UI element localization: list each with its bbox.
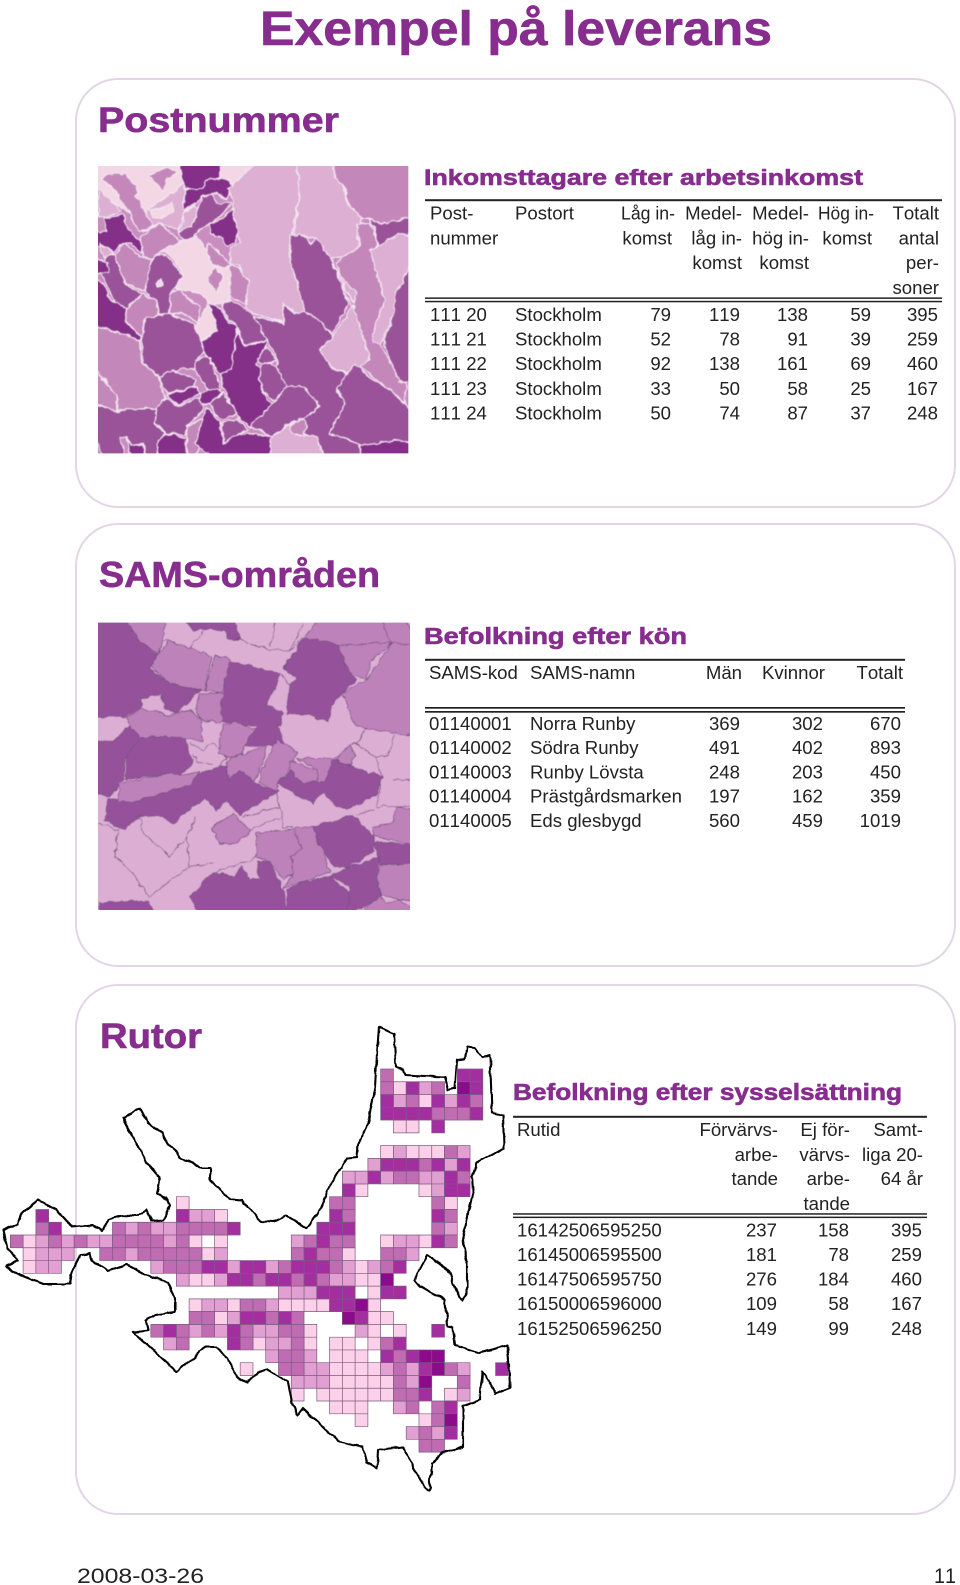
table: inkomsttagare: Stockholm <box>515 304 602 325</box>
table: inkomsttagare: 111 22 <box>430 353 487 374</box>
table: inkomsttagare: 111 24 <box>430 402 487 423</box>
table: inkomsttagare: låg in- <box>691 228 742 248</box>
table heading: Befolkning efter sysselsättning: Befolkning efter sysselsättning <box>513 1079 902 1105</box>
table: befolkning efter kön: 162 <box>792 786 823 807</box>
table: befolkning efter kön: Eds glesbygd <box>530 810 642 831</box>
table: befolkning efter sysselsättning: 58 <box>828 1293 849 1314</box>
map: postnummer areas <box>90 160 417 460</box>
table: befolkning efter sysselsättning: 460 <box>891 1269 922 1290</box>
table: befolkning efter sysselsättning: 248 <box>891 1318 922 1339</box>
panel: SAMS-områden <box>76 524 955 966</box>
table: inkomsttagare: 91 <box>787 329 808 350</box>
table: inkomsttagare: 111 21 <box>430 329 487 350</box>
table: befolkning efter kön: 369 <box>709 713 740 734</box>
table: befolkning efter sysselsättning: värvs- <box>799 1144 850 1165</box>
table heading: Inkomsttagare efter arbetsinkomst: Inkomsttagare efter arbetsinkomst <box>424 165 864 190</box>
table: befolkning efter sysselsättning <box>513 1116 927 1339</box>
table: inkomsttagare: Postort <box>515 202 575 224</box>
table: befolkning efter kön: SAMS-namn <box>530 662 635 683</box>
table: befolkning efter kön: 01140005 <box>429 810 512 831</box>
table: inkomsttagare: komst <box>759 252 810 273</box>
table: inkomsttagare: 167 <box>907 378 938 399</box>
table: befolkning efter sysselsättning: 16142506595250 <box>517 1220 662 1241</box>
table: befolkning efter kön: 491 <box>709 737 740 758</box>
table: inkomsttagare: 25 <box>850 378 871 399</box>
table: befolkning efter kön: 302 <box>792 713 823 734</box>
table: befolkning efter sysselsättning: arbe- <box>735 1144 778 1165</box>
table: inkomsttagare: 395 <box>907 304 938 325</box>
table: befolkning efter kön: 01140002 <box>429 737 512 758</box>
table: befolkning efter sysselsättning: 109 <box>746 1293 777 1314</box>
table: inkomsttagare: Stockholm <box>515 329 602 350</box>
table: befolkning efter sysselsättning: 158 <box>818 1220 849 1241</box>
table: befolkning efter kön: 459 <box>792 810 823 831</box>
table: befolkning efter kön: Norra Runby <box>530 713 636 734</box>
table: befolkning efter kön: 402 <box>792 737 823 758</box>
table: inkomsttagare: Stockholm <box>515 402 602 423</box>
table: befolkning efter sysselsättning: liga 20- <box>862 1144 923 1165</box>
table: inkomsttagare: 50 <box>650 402 671 423</box>
table: befolkning efter kön: 893 <box>870 737 901 758</box>
table: befolkning efter kön: 01140003 <box>429 761 512 782</box>
table: inkomsttagare: Medel- <box>685 202 742 224</box>
table: befolkning efter sysselsättning: 259 <box>891 1244 922 1265</box>
table: inkomsttagare: Hög in- <box>818 202 874 224</box>
table: befolkning efter kön: 450 <box>870 761 901 782</box>
table: inkomsttagare: 50 <box>719 378 740 399</box>
heading: Postnummer: Postnummer <box>98 101 339 140</box>
table: befolkning efter sysselsättning: 181 <box>746 1244 777 1265</box>
table: befolkning efter sysselsättning: tande <box>803 1193 850 1214</box>
heading: Rutor: Rutor <box>100 1017 202 1056</box>
table: befolkning efter sysselsättning: 184 <box>818 1269 849 1290</box>
table: befolkning efter sysselsättning: 149 <box>746 1318 777 1339</box>
table: inkomsttagare: nummer <box>430 228 498 248</box>
table: befolkning efter sysselsättning: Förvärvs- <box>699 1119 778 1140</box>
table: befolkning efter kön: Män <box>706 662 742 683</box>
table: inkomsttagare: Låg in- <box>621 202 675 224</box>
table: befolkning efter sysselsättning: Samt- <box>873 1119 923 1140</box>
table: inkomsttagare <box>425 199 942 423</box>
table: inkomsttagare: komst <box>622 228 673 248</box>
table: inkomsttagare: 59 <box>850 304 871 325</box>
map: region outline <box>3 1027 510 1491</box>
table: befolkning efter kön: 01140001 <box>429 713 512 734</box>
table: inkomsttagare: komst <box>822 228 873 248</box>
table heading: Befolkning efter kön: Befolkning efter kön <box>424 623 687 649</box>
table: befolkning efter kön: 670 <box>870 713 901 734</box>
table: inkomsttagare: 138 <box>777 304 808 325</box>
table: befolkning efter kön: 248 <box>709 761 740 782</box>
table: befolkning efter sysselsättning: Rutid <box>517 1119 560 1140</box>
table: inkomsttagare: 39 <box>850 329 871 350</box>
table: inkomsttagare: 37 <box>850 402 871 423</box>
table: inkomsttagare: 69 <box>850 353 871 374</box>
table: befolkning efter kön: 203 <box>792 761 823 782</box>
table: inkomsttagare: 33 <box>650 378 671 399</box>
table: befolkning efter sysselsättning: tande <box>731 1168 778 1189</box>
table: befolkning efter kön <box>425 659 905 831</box>
panel: Rutor <box>3 985 955 1514</box>
table: inkomsttagare: per- <box>906 252 939 273</box>
table: inkomsttagare: 79 <box>650 304 671 325</box>
table: befolkning efter kön: Runby Lövsta <box>530 761 644 782</box>
table: inkomsttagare: 138 <box>709 353 740 374</box>
table: inkomsttagare: 52 <box>650 329 671 350</box>
table: befolkning efter sysselsättning: 237 <box>746 1220 777 1241</box>
table: inkomsttagare: hög in- <box>752 228 809 248</box>
table: befolkning efter kön: 1019 <box>860 810 901 831</box>
table: befolkning efter kön: Kvinnor <box>762 662 825 683</box>
table: inkomsttagare: antal <box>899 228 939 248</box>
table: inkomsttagare: 92 <box>650 353 671 374</box>
table: inkomsttagare: 87 <box>787 402 808 423</box>
table: befolkning efter sysselsättning: arbe- <box>807 1168 850 1189</box>
table: befolkning efter kön: 560 <box>709 810 740 831</box>
table: befolkning efter sysselsättning: 16152506596250 <box>517 1318 662 1339</box>
table: inkomsttagare: soner <box>892 277 939 298</box>
table: befolkning efter kön: 359 <box>870 786 901 807</box>
table: inkomsttagare: Totalt <box>892 202 940 224</box>
table: inkomsttagare: komst <box>692 252 743 273</box>
table: inkomsttagare: 58 <box>787 378 808 399</box>
table: inkomsttagare: Post- <box>430 202 473 224</box>
panel: Postnummer <box>76 79 955 507</box>
table: befolkning efter sysselsättning: 276 <box>746 1269 777 1290</box>
map: grid cells <box>10 1069 508 1452</box>
table: inkomsttagare: 78 <box>719 329 740 350</box>
table: befolkning efter kön: Totalt <box>856 662 904 683</box>
table: befolkning efter kön: SAMS-kod <box>429 662 518 683</box>
table: inkomsttagare: Stockholm <box>515 353 602 374</box>
table: befolkning efter sysselsättning: 78 <box>828 1244 849 1265</box>
table: inkomsttagare: 460 <box>907 353 938 374</box>
table: inkomsttagare: 111 23 <box>430 378 487 399</box>
table: inkomsttagare: Medel- <box>752 202 809 224</box>
table: befolkning efter sysselsättning: Ej för- <box>800 1119 850 1140</box>
table: befolkning efter kön: Södra Runby <box>530 737 639 758</box>
table: inkomsttagare: 111 20 <box>430 304 487 325</box>
table: befolkning efter sysselsättning: 64 år <box>881 1168 923 1189</box>
table: befolkning efter sysselsättning: 16147506595750 <box>517 1269 662 1290</box>
table: befolkning efter kön: 01140004 <box>429 786 512 807</box>
table: inkomsttagare: Stockholm <box>515 378 602 399</box>
heading: SAMS-områden: SAMS-områden <box>99 554 380 595</box>
table: befolkning efter sysselsättning: 395 <box>891 1220 922 1241</box>
table: inkomsttagare: 119 <box>709 304 740 325</box>
table: befolkning efter sysselsättning: 16145006595500 <box>517 1244 662 1265</box>
table: befolkning efter sysselsättning: 167 <box>891 1293 922 1314</box>
table: inkomsttagare: 74 <box>719 402 740 423</box>
table: inkomsttagare: 161 <box>777 353 808 374</box>
table: befolkning efter kön: 197 <box>709 786 740 807</box>
table: befolkning efter kön: Prästgårdsmarken <box>530 786 682 807</box>
map: SAMS areas <box>98 622 410 910</box>
table: inkomsttagare: 259 <box>907 329 938 350</box>
title: Exempel på leverans <box>260 3 772 56</box>
table: befolkning efter sysselsättning: 16150006596000 <box>517 1293 662 1314</box>
table: befolkning efter sysselsättning: 99 <box>828 1318 849 1339</box>
table: inkomsttagare: 248 <box>907 402 938 423</box>
